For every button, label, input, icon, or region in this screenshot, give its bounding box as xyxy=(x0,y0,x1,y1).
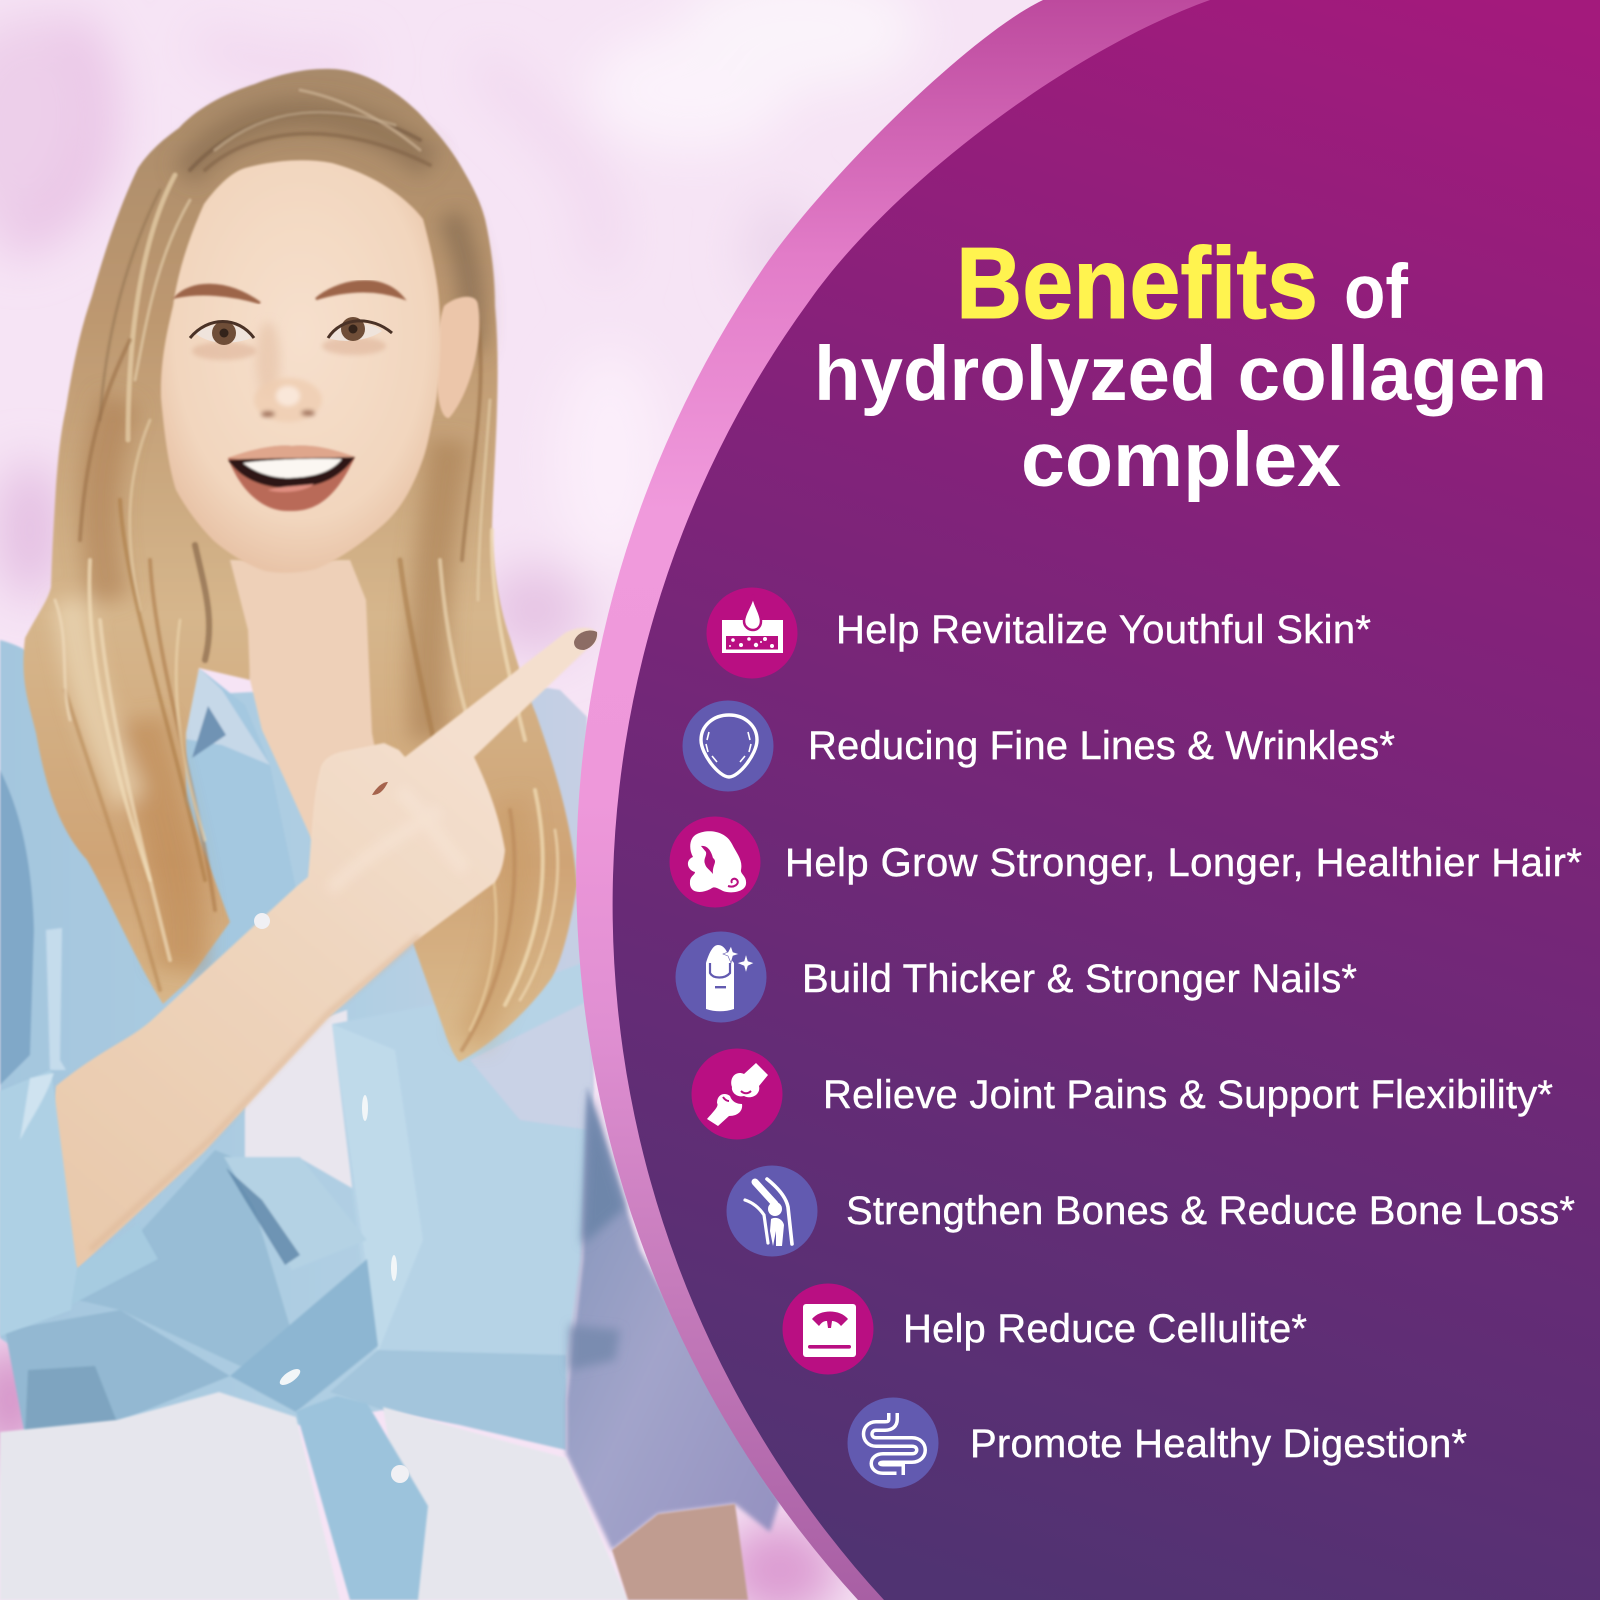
buttons xyxy=(254,913,409,1483)
title: complex xyxy=(1021,417,1341,503)
title: hydrolyzed collagen xyxy=(814,331,1547,417)
icon: weighing scale xyxy=(782,1284,874,1374)
eyes xyxy=(190,317,392,360)
nose xyxy=(254,378,322,422)
label: skin: Help Revitalize Youthful Skin* xyxy=(836,608,1371,652)
icon: nail xyxy=(676,932,766,1022)
label: digestion: Promote Healthy Digestion* xyxy=(970,1422,1467,1466)
left cuff xyxy=(0,1070,158,1336)
label: bones: Strengthen Bones & Reduce Bone Loss* xyxy=(846,1189,1575,1233)
benefit 4: nails xyxy=(676,932,1357,1022)
benefit 5: joint xyxy=(692,1048,1553,1140)
benefit 1: skin xyxy=(706,588,1371,678)
right forearm xyxy=(612,1504,748,1600)
label: nails: Build Thicker & Stronger Nails* xyxy=(802,957,1357,1001)
benefit 6: bones xyxy=(726,1166,1575,1256)
icon: joint xyxy=(692,1048,782,1140)
shirt body xyxy=(0,640,594,1450)
benefit 3: hair xyxy=(670,816,1582,908)
left arm and pointing hand xyxy=(51,628,597,1269)
benefit 8: digestion xyxy=(848,1398,1467,1488)
icon: intestine xyxy=(848,1398,938,1488)
benefit 2: wrinkles xyxy=(682,700,1395,792)
pink curved band xyxy=(576,0,1600,1600)
benefit 7: cellulite xyxy=(782,1284,1307,1374)
white trousers xyxy=(0,1392,628,1600)
title: of xyxy=(1344,249,1408,335)
icon: skin xyxy=(706,588,798,678)
mouth xyxy=(228,446,355,511)
ear xyxy=(436,297,479,418)
icon: face outline xyxy=(682,700,774,792)
title: Benefits xyxy=(956,228,1318,340)
hair strands xyxy=(55,90,558,1050)
right sleeve xyxy=(566,1086,780,1550)
shirt tie xyxy=(296,1396,428,1600)
neck xyxy=(225,530,388,840)
nail xyxy=(574,630,597,650)
label: joint: Relieve Joint Pains & Support Flexibility* xyxy=(823,1073,1553,1117)
face xyxy=(161,160,440,573)
hair shading xyxy=(70,114,516,1040)
icon: hair xyxy=(670,816,760,908)
title xyxy=(814,228,1547,503)
icon: knee bones xyxy=(726,1166,818,1256)
hair xyxy=(23,69,577,1062)
brows xyxy=(176,281,403,303)
purple curved panel xyxy=(613,0,1600,1600)
label: wrinkles: Reducing Fine Lines & Wrinkles* xyxy=(808,724,1395,768)
label: hair: Help Grow Stronger, Longer, Healthier Hair* xyxy=(785,841,1582,885)
label: cellulite: Help Reduce Cellulite* xyxy=(903,1307,1307,1351)
woman photo illustration xyxy=(0,69,780,1600)
